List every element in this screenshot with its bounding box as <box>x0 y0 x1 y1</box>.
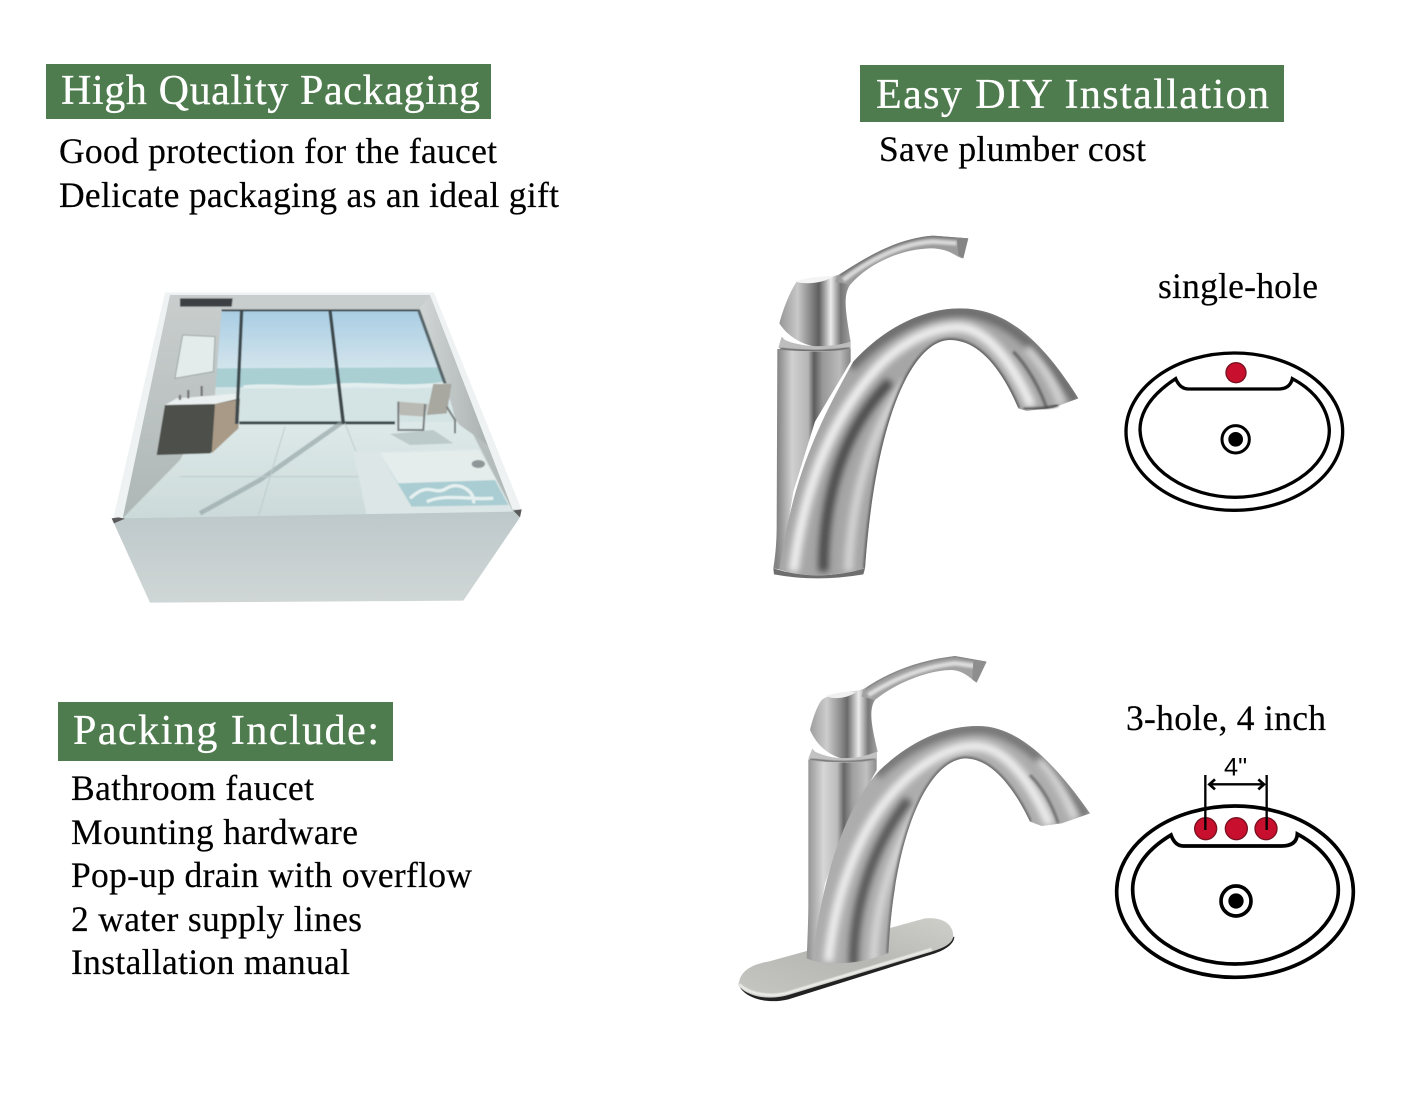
text block: packing list: 2 water supply lines <box>71 899 362 939</box>
heading: Packing Include: Packing Include: <box>73 708 379 754</box>
image: single-hole faucet <box>773 236 1078 578</box>
label: single-hole: single-hole <box>1158 266 1318 306</box>
heading: Easy DIY Installation: Easy DIY Installation <box>876 72 1269 118</box>
text block: packaging benefits <box>59 131 559 215</box>
diagram: 3-hole sink with 4 inch spacing: 4" <box>1224 753 1247 781</box>
text block: packing list: Installation manual <box>71 942 350 982</box>
text block: save plumber cost: Save plumber cost <box>879 129 1146 169</box>
heading: High Quality Packaging: High Quality Packaging <box>61 68 480 114</box>
text block: packing list: Pop-up drain with overflow <box>71 855 472 895</box>
text block: packing list: Bathroom faucet <box>71 768 314 808</box>
text block: packaging benefits: Delicate packaging as an ideal gift <box>59 175 559 215</box>
label: 3-hole, 4 inch: 3-hole, 4 inch <box>1126 698 1326 738</box>
text block: packaging benefits: Good protection for the faucet <box>59 131 497 171</box>
text block: packing list: Mounting hardware <box>71 812 358 852</box>
diagram: single-hole sink <box>1126 353 1343 510</box>
image: product box with bathroom photo <box>112 293 522 603</box>
image: 3-hole faucet with deck plate <box>738 656 1090 1001</box>
diagram: 3-hole sink with 4 inch spacing <box>1117 753 1353 977</box>
text block: packing list <box>71 768 472 982</box>
